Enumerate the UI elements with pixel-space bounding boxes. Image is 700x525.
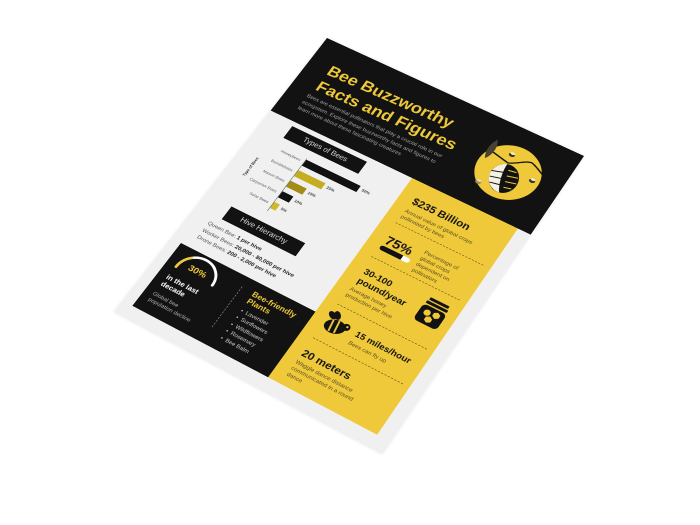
heading: Hive Hierarchy: Hive Hierarchy	[238, 216, 289, 245]
panel: decline and plants	[132, 243, 315, 377]
text: dependent crops: pollinators	[411, 267, 439, 284]
text: honey production: Average honey	[348, 285, 388, 309]
text: waggle dance: dance	[285, 371, 304, 384]
intro text: ecosystem. Explore these buzzworthy facts and figures to	[301, 99, 438, 164]
text: crop value: Annual value of global crops	[404, 208, 474, 245]
text: dependent crops	[411, 249, 460, 284]
gauge: 30 percent	[174, 256, 218, 287]
list: plants	[219, 307, 270, 354]
text: flight speed: Bees can fly up	[347, 339, 388, 364]
stat: in the last decade: decade	[159, 280, 187, 298]
stat: 15 miles/hour: 15 miles/hour	[353, 329, 413, 366]
title: Bee Buzzworthy	[324, 63, 458, 131]
list: plants: • Lavender	[239, 307, 270, 327]
text: hive hierarchy figures: Queen Bee: 1 per hive	[206, 220, 264, 252]
stat: 30-100 pound/year: 30-100	[362, 266, 395, 289]
bars: 5%	[280, 207, 288, 213]
bar chart: types of bees	[242, 149, 371, 213]
stat: 20 meters: 20 meters	[299, 348, 353, 382]
bars: 15%	[306, 191, 317, 198]
heading: Bee-friendly Plants: Bee-friendly	[250, 290, 298, 319]
title: Facts and Figures	[313, 78, 461, 153]
stat: 30-100 pound/year: pound/year	[355, 275, 409, 308]
stat: in the last decade: in the last	[164, 273, 200, 296]
bars: 10%	[293, 199, 303, 206]
row labels	[248, 149, 301, 204]
text: crop value: pollinated by bees	[399, 213, 446, 239]
bars: 50%	[360, 188, 371, 196]
axis title: Type of Bees	[242, 157, 260, 177]
progress bar	[379, 245, 411, 263]
intro text: learn more about these fascinating creatures	[297, 105, 403, 157]
bars	[270, 160, 371, 213]
divider	[212, 287, 242, 327]
heading: Hive Hierarchy	[222, 206, 305, 256]
text: population decline: Global bee	[151, 290, 180, 308]
heading: Types of Bees: Types of Bees	[301, 136, 349, 163]
panel: header	[271, 38, 584, 235]
heading: Bee-friendly Plants: Plants	[245, 297, 273, 316]
text: dependent crops: global crops	[419, 255, 452, 275]
row labels: Mason Bees	[262, 169, 286, 183]
list: plants: • Sunflowers	[234, 314, 269, 336]
stat: $235 Billion: $235 Billion	[410, 196, 472, 233]
stat: 75%: 75%	[382, 234, 416, 258]
text: dependent crops: dependent on	[415, 261, 451, 282]
text: honey production: production per hive	[344, 291, 394, 320]
text: hive hierarchy figures: Worker Bees: 20,000 - 80,000 per hive	[201, 227, 296, 278]
text: hive hierarchy figures: Drone Bees: 200 - 2,000 per hive	[196, 234, 278, 279]
text: waggle dance: communicated in a round	[290, 365, 355, 402]
icon: yellow circle with beehive	[474, 140, 542, 200]
text: waggle dance: Waggle dance distance	[294, 358, 355, 393]
gauge value: 30%	[186, 263, 209, 280]
bars: 25%	[325, 186, 335, 193]
list: plants: • Bee Balm	[219, 334, 251, 354]
icon: honey jar	[414, 297, 450, 329]
row labels: Bumblebees	[270, 159, 294, 173]
axis line	[267, 158, 307, 211]
text: dependent crops: Percentage of	[423, 249, 460, 271]
text: population decline: population decline	[147, 296, 193, 323]
heading: Types of Bees	[283, 126, 367, 174]
icon: bee	[324, 311, 351, 334]
row labels: Solar Bees	[248, 192, 270, 204]
panel: yellow stats column	[268, 178, 518, 435]
row labels: Carpenter Bees	[248, 177, 278, 194]
list: plants: • Wildflowers	[229, 321, 265, 343]
intro text: Bees are essential pollinators that play a crucial role in our	[306, 93, 444, 159]
list: plants: • Rosemary	[224, 328, 257, 348]
poster page	[114, 38, 584, 454]
row labels: Honeybees	[280, 149, 301, 162]
